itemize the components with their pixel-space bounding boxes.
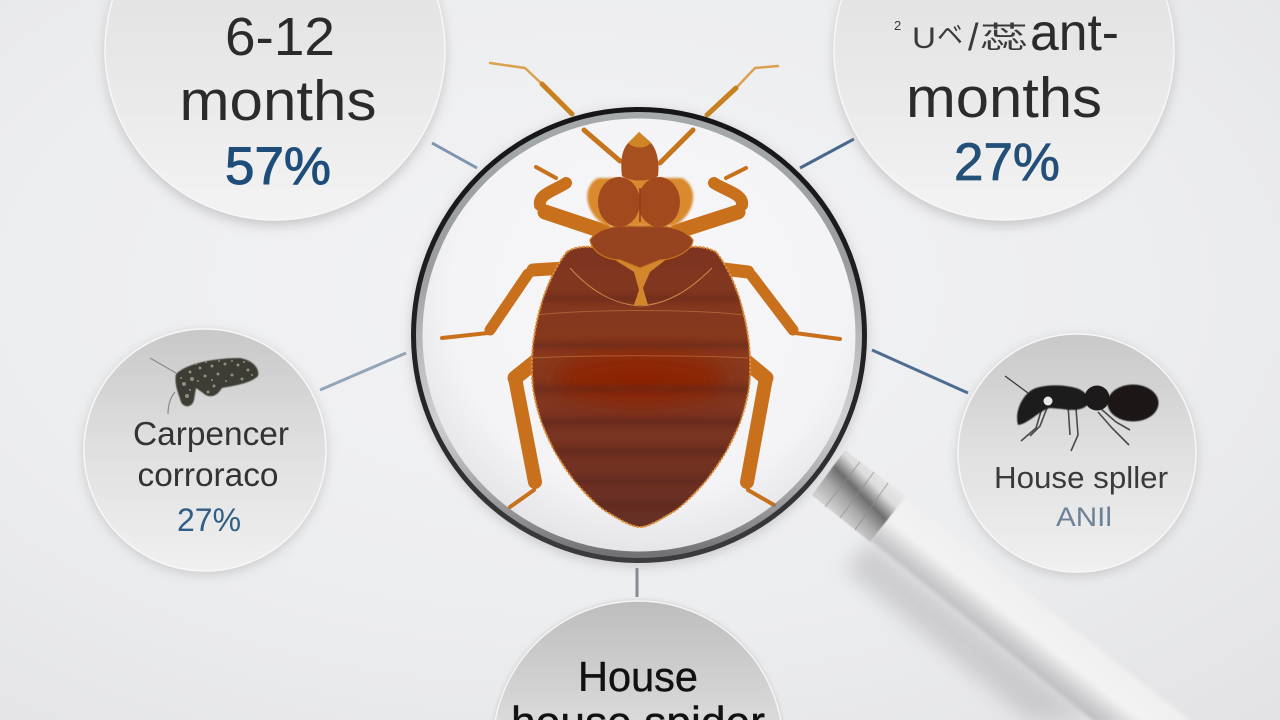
connector lines [320, 139, 968, 597]
thorax [587, 177, 693, 227]
species code: ANIl [1056, 502, 1112, 532]
handle ferrule [812, 450, 906, 542]
months text: months [180, 69, 376, 133]
ant text: ant- [1030, 4, 1119, 62]
percentage: 57% [225, 137, 331, 196]
heading: House [578, 653, 698, 700]
magnifying glass lens [411, 109, 867, 566]
months text: months [906, 66, 1102, 130]
rear legs [510, 358, 774, 507]
garbled heading text: 2 [894, 18, 901, 33]
abdomen [530, 247, 752, 527]
head [621, 132, 659, 180]
species name second line: corroraco [138, 456, 278, 493]
middle legs [442, 268, 840, 339]
percentage: 27% [177, 502, 241, 538]
pronotum [590, 226, 693, 268]
bed bug [442, 130, 840, 527]
antennae outside the lens [490, 63, 778, 115]
garbled heading text: 蕊 [980, 22, 1028, 55]
panel: bottom house spider stat [492, 600, 784, 720]
front legs [536, 167, 746, 232]
species name: House spller [994, 460, 1168, 495]
icon: speckled beetle [150, 358, 258, 414]
panel: top left stat [105, 0, 445, 225]
icon: black ant [1005, 376, 1158, 451]
magnifying glass handle [812, 450, 1192, 720]
garbled heading text: U [912, 22, 936, 55]
panel: house spider stat [958, 334, 1196, 575]
garbled heading text: ベ [937, 20, 963, 50]
percentage: 27% [954, 133, 1060, 192]
garbled heading text [894, 17, 1028, 59]
panel: top right stat [834, 0, 1174, 225]
species name: Carpencer [133, 415, 289, 452]
antennae inside the lens [584, 130, 693, 163]
panel: carpenter stat [84, 329, 326, 574]
garbled heading text: / [968, 17, 979, 59]
lens ring [414, 110, 864, 560]
duration text: 6-12 [225, 7, 335, 67]
